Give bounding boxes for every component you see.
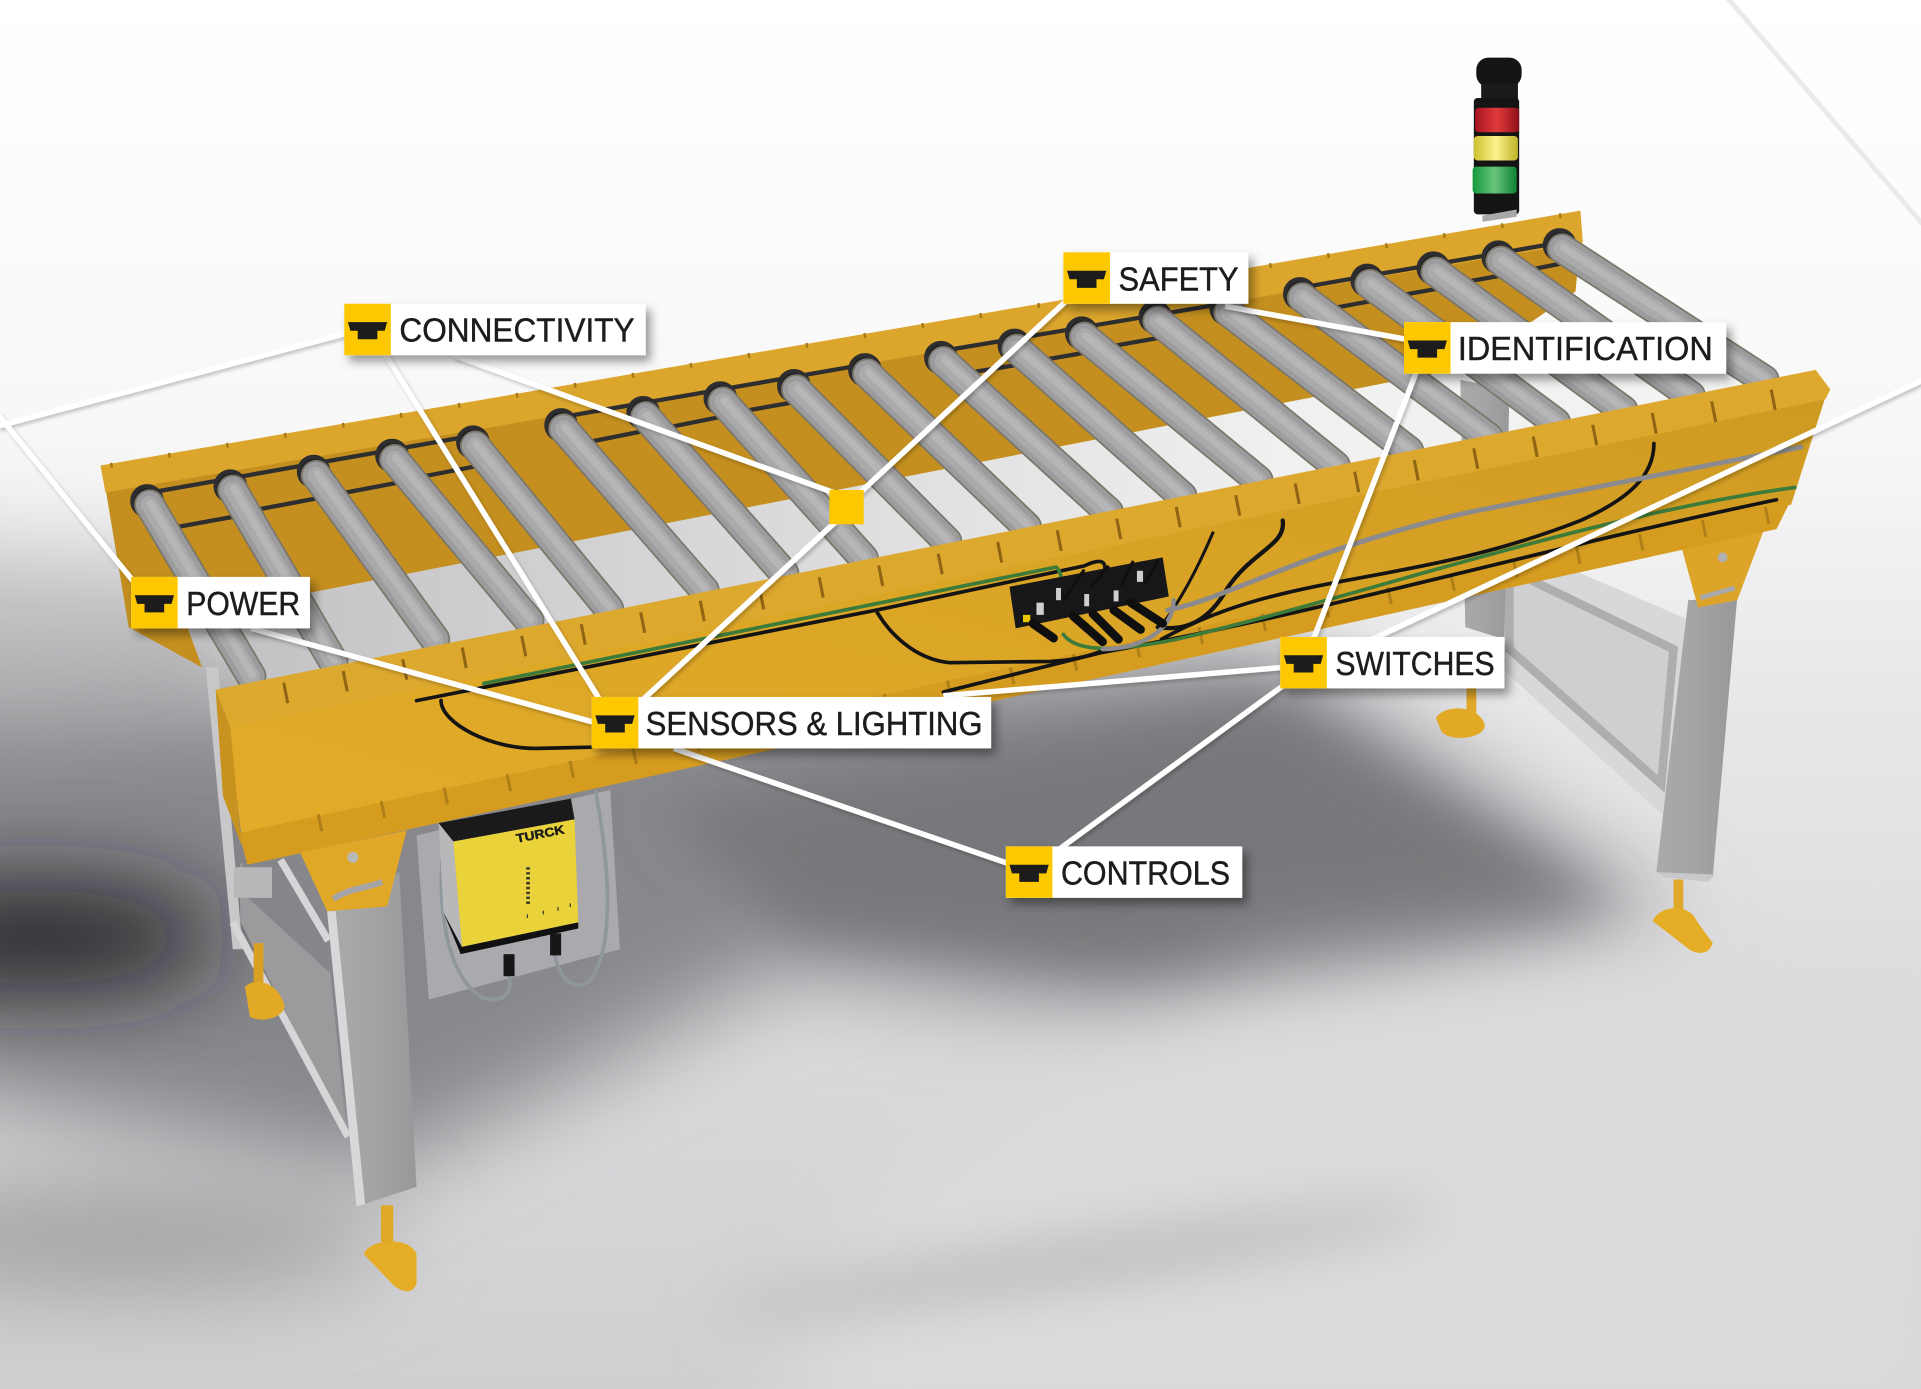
status LEDs <box>527 867 571 916</box>
label: power <box>131 577 310 628</box>
label: safety <box>1063 252 1248 304</box>
rear right leg and frame <box>1436 380 1686 818</box>
device logo: TURCK <box>515 823 566 846</box>
label: connectivity <box>344 304 646 355</box>
back rail <box>100 211 1583 668</box>
front rail <box>216 370 1830 911</box>
label: identification: IDENTIFICATION <box>1458 331 1713 368</box>
rollers <box>149 247 1765 676</box>
hub square <box>829 490 864 524</box>
label: sensors and lighting: SENSORS & LIGHTING <box>646 706 983 743</box>
o-ring belts behind rollers <box>132 230 1574 529</box>
gap below rollers <box>159 363 1770 686</box>
label: identification <box>1404 322 1726 374</box>
label: controls: CONTROLS <box>1061 855 1230 892</box>
label: power: POWER <box>186 586 300 623</box>
connector lines <box>0 301 1921 864</box>
label: sensors and lighting <box>592 697 991 748</box>
mounting plate, field module and cables <box>417 790 620 999</box>
label: safety: SAFETY <box>1119 261 1239 298</box>
I/O block module <box>1010 557 1169 642</box>
label: connectivity: CONNECTIVITY <box>399 313 635 350</box>
front left leg and frame <box>206 668 417 1291</box>
label: controls <box>1006 846 1242 898</box>
label: switches: SWITCHES <box>1335 646 1495 683</box>
cables on front rail <box>417 443 1801 748</box>
front right leg <box>1653 529 1764 953</box>
stack light <box>1473 58 1522 222</box>
label: switches <box>1280 637 1504 688</box>
